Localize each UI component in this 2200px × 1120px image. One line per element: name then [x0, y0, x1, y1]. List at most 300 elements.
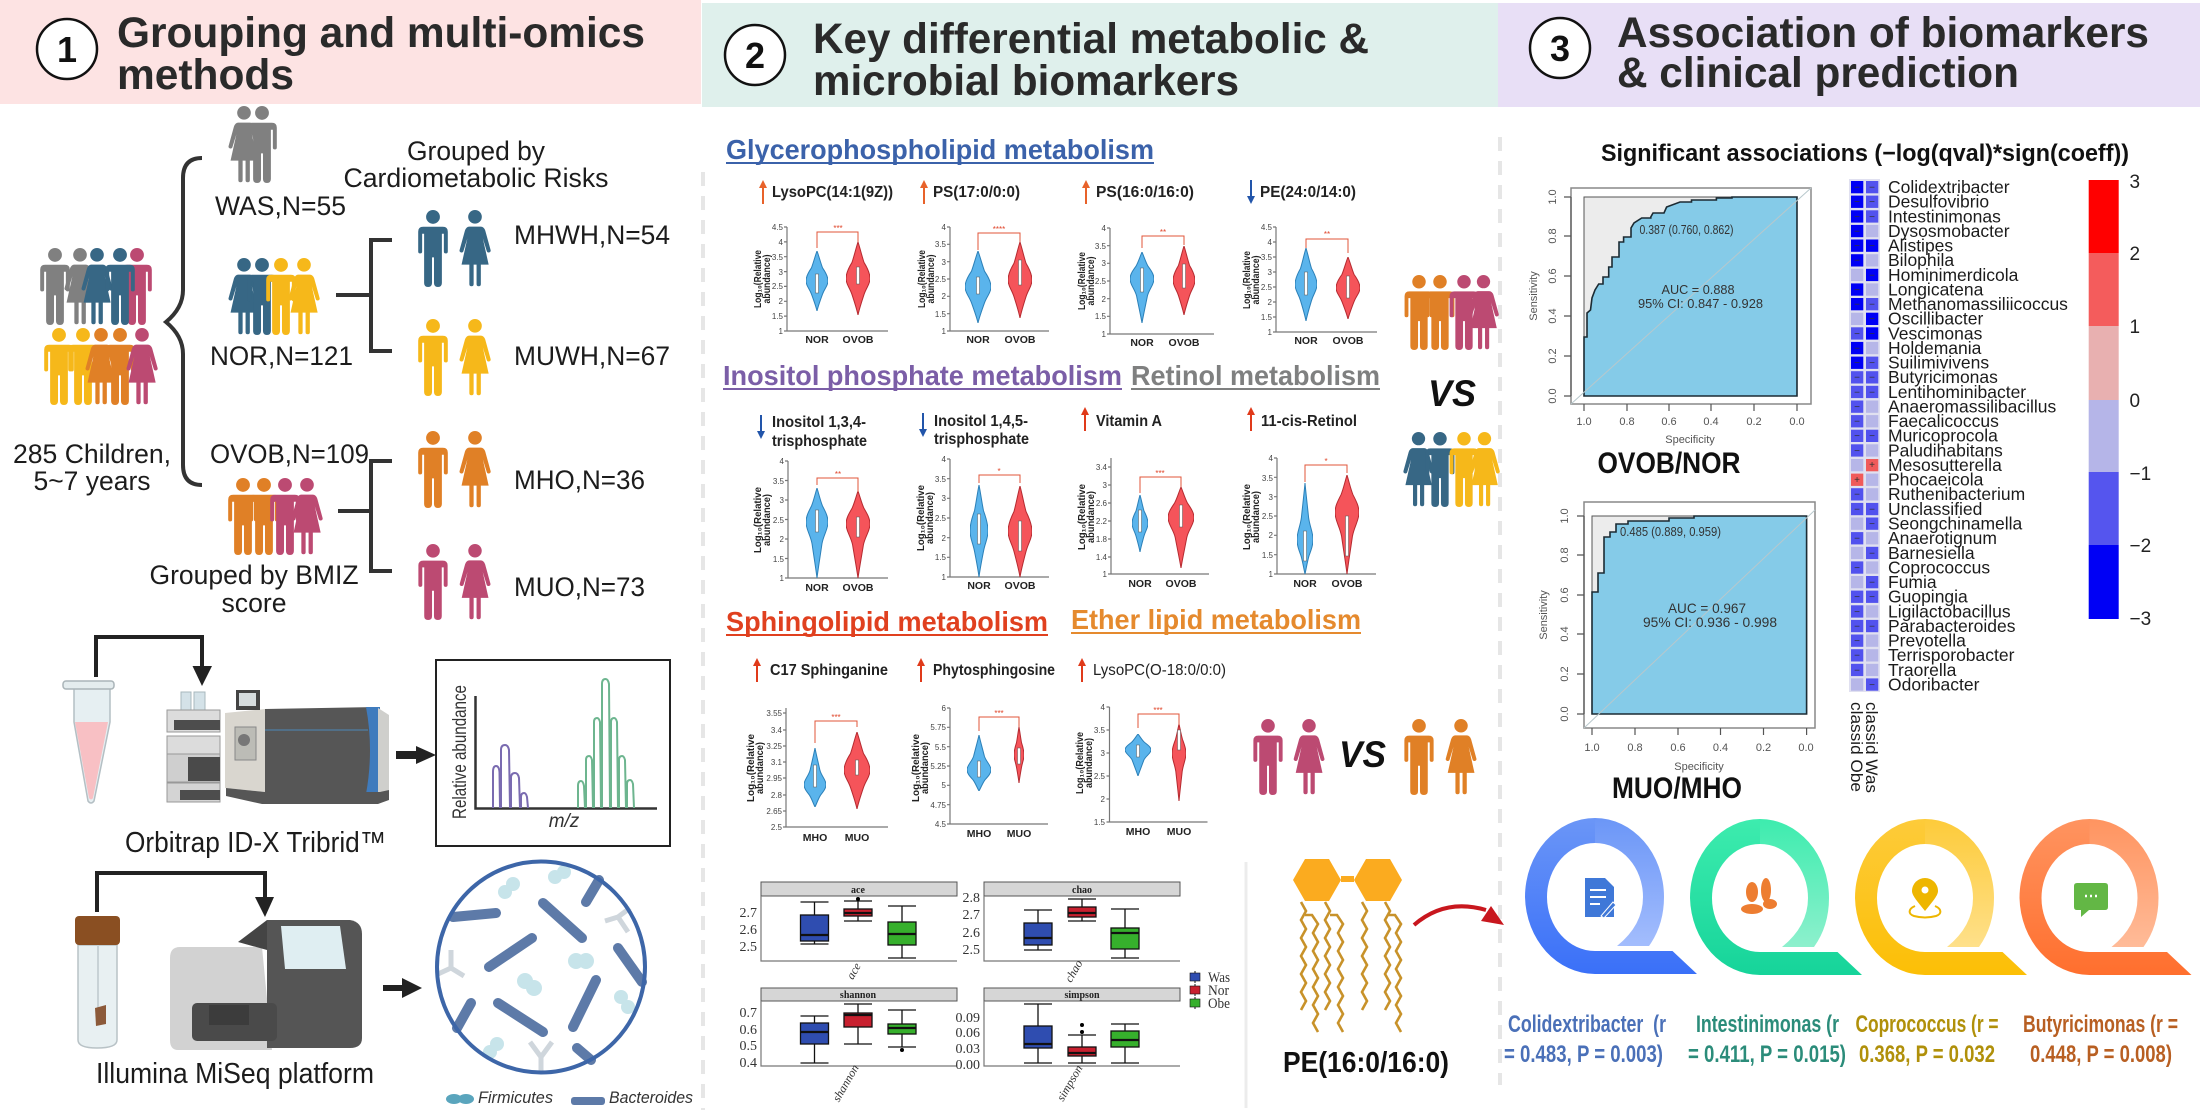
violin: LysoPC(O-18:0/0:0): LysoPC(O-18:0/0:0) — [1093, 662, 1226, 679]
header 2: Key differential metabolic & — [813, 15, 1369, 63]
violin: PS(16:0/16:0): 4 — [1102, 224, 1107, 233]
violin: inositol 1,3,4-trisphosphate: OVOB — [843, 582, 874, 594]
violin: vitamin A: 1.8 — [1096, 535, 1108, 544]
ROC chart: MUO/MHO: 0.0 — [1559, 706, 1571, 722]
chart: mass spectrum — [436, 660, 670, 846]
colour scale legend — [2089, 172, 2151, 630]
heatmap: significant associations: Traorella — [1888, 660, 1957, 680]
group: MUO — [418, 544, 645, 620]
arrow: stool to sequencer — [97, 873, 265, 912]
heatmap: significant associations: Ruthenibacterium — [1888, 484, 2025, 504]
panel 3: association and clinical prediction — [1498, 3, 2200, 1068]
heatmap: significant associations: Lentihominibacter — [1888, 382, 2026, 402]
violin: LysoPC(O-18:0/0:0): Log₁₀(Relative — [1075, 732, 1086, 794]
ROC chart: OVOB/NOR: Specificity — [1665, 434, 1715, 446]
violin: LysoPC(14:1(9Z)): 1 — [779, 327, 784, 336]
label: 285 children — [13, 439, 171, 496]
ROC chart: OVOB/NOR: 0.2 — [1746, 416, 1762, 428]
box plot: shannon: shannon — [829, 1062, 862, 1104]
group: MHWH — [418, 210, 670, 287]
heatmap: significant associations: Ligilactobacillus — [1888, 601, 2011, 621]
violin: PE(24:0/14:0): 4 — [1268, 238, 1273, 247]
ring card: Butyricimonas — [2020, 819, 2192, 1068]
violin: LysoPC(O-18:0/0:0): 2.5 — [1094, 772, 1106, 781]
violin: PE(24:0/14:0): 3 — [1268, 268, 1273, 277]
icon: microbiome circle — [437, 862, 645, 1072]
violin: inositol 1,3,4-trisphosphate — [753, 414, 888, 594]
heatmap: significant associations: Desulfovibrio — [1888, 192, 1989, 212]
violin: LysoPC(14:1(9Z)): NOR — [805, 334, 829, 346]
violin: C17 sphinganine: *** — [831, 713, 841, 722]
violin: inositol 1,3,4-trisphosphate: ** — [835, 470, 841, 479]
box plot: simpson — [956, 988, 1180, 1104]
ROC chart: OVOB/NOR — [1528, 188, 1811, 446]
violin: 11-cis-retinol: 1.5 — [1262, 551, 1274, 560]
group icons: OVOB vs NOR — [1403, 275, 1500, 507]
violin: PE(24:0/14:0): Log₁₀(Relative — [1242, 251, 1253, 309]
violin: PS(17:0/0:0): OVOB — [1005, 334, 1036, 346]
ROC chart: OVOB/NOR: 0.6 — [1547, 268, 1559, 284]
heatmap: significant associations: Hominimerdicola — [1888, 265, 2019, 285]
violin: C17 sphinganine — [746, 658, 888, 844]
ROC chart: MUO/MHO: 1.0 — [1559, 508, 1571, 524]
violin: PE(24:0/14:0): NOR — [1294, 335, 1318, 347]
violin: 11-cis-retinol: 2.5 — [1262, 512, 1274, 521]
violin: PS(16:0/16:0): 1.5 — [1095, 312, 1107, 321]
heading: glycerophospholipid metabolism: Glycerophospholipid metabolism — [726, 134, 1154, 165]
violin: LysoPC(O-18:0/0:0): 2 — [1101, 795, 1106, 804]
connector: NOR split — [336, 240, 392, 351]
ring card: Coprococcus: Coprococcus (r = — [1856, 1011, 1998, 1038]
violin: inositol 1,3,4-trisphosphate: abundance) — [762, 494, 773, 546]
ROC chart: OVOB/NOR: 0.2 — [1547, 348, 1559, 364]
ROC chart: MUO/MHO: 0.6 — [1559, 587, 1571, 603]
violin: PS(17:0/0:0): 2 — [942, 292, 947, 301]
violin: LysoPC(O-18:0/0:0): abundance) — [1084, 738, 1095, 788]
violin: vitamin A: 3.4 — [1096, 463, 1108, 472]
violin: LysoPC(14:1(9Z)): 2 — [779, 297, 784, 306]
ROC chart: MUO/MHO: 0.485 (0.889, 0.959) — [1620, 525, 1721, 539]
ROC chart: MUO/MHO: 0.8 — [1559, 547, 1571, 563]
ROC chart: MUO/MHO: 0.2 — [1559, 666, 1571, 682]
header 3: Association of biomarkers — [1617, 9, 2149, 57]
group: MUWH: MUWH,N=67 — [514, 341, 670, 371]
box plot: chao: chao — [1072, 885, 1092, 896]
heatmap: significant associations: −−−−−−−−−−−−−−−−−−−−−−−−−−− — [1854, 182, 1860, 676]
heatmap: significant associations: Alistipes — [1888, 236, 1953, 256]
violin: PS(16:0/16:0): 1 — [1102, 330, 1107, 339]
violin: 11-cis-retinol: 2 — [1269, 531, 1274, 540]
icon: PE(16:0/16:0) molecule — [1293, 859, 1402, 1032]
ring card: Colidextribacter: Colidextribacter (r — [1508, 1011, 1666, 1038]
ring card: Intestinimonas: Intestinimonas (r — [1696, 1011, 1839, 1038]
group: MUO: MUO,N=73 — [514, 572, 645, 602]
violin: inositol 1,4,5-trisphosphate: NOR — [967, 580, 991, 592]
colour scale legend: 3 — [2130, 172, 2140, 193]
header 1 — [0, 0, 701, 104]
violin: 11-cis-retinol — [1242, 407, 1376, 590]
label: MUO/MHO: MUO/MHO — [1612, 772, 1742, 805]
box plot: shannon: 0.6 — [740, 1023, 757, 1038]
box plot: shannon: 0.5 — [740, 1039, 757, 1054]
violin: LysoPC(14:1(9Z)): LysoPC(14:1(9Z)) — [772, 184, 893, 201]
icon: all children group — [40, 248, 158, 405]
violin: phytosphingosine: abundance) — [920, 742, 931, 794]
header 1: Grouping and multi-omics — [117, 9, 645, 57]
heatmap: significant associations: Paludihabitans — [1888, 440, 2003, 460]
violin: LysoPC(14:1(9Z)): Log₁₀(Relative — [753, 250, 764, 308]
heatmap: significant associations: Barnesiella — [1888, 543, 1975, 563]
violin: phytosphingosine: MUO — [1007, 828, 1031, 840]
violin: inositol 1,3,4-trisphosphate: Inositol 1,3,4- — [772, 414, 866, 431]
heading: sphingolipid metabolism: Sphingolipid metabolism — [726, 606, 1048, 637]
violin: C17 sphinganine: 2.5 — [771, 823, 783, 832]
violin: LysoPC(O-18:0/0:0): MHO — [1126, 826, 1150, 838]
violin: PS(16:0/16:0): 2 — [1102, 295, 1107, 304]
group: OVOB: OVOB,N=109 — [210, 439, 369, 469]
violin: LysoPC(14:1(9Z)): 3.5 — [772, 253, 784, 262]
heatmap: significant associations: + — [1854, 475, 1860, 486]
heatmap: significant associations: Suilimivivens — [1888, 353, 1989, 373]
heatmap: significant associations: Intestinimonas — [1888, 206, 2001, 226]
violin: PS(17:0/0:0): **** — [993, 225, 1005, 234]
violin: phytosphingosine — [911, 658, 1055, 840]
violin: C17 sphinganine: 3.25 — [766, 742, 783, 751]
label: 285 children: 285 Children, — [13, 439, 171, 469]
violin: C17 sphinganine: MUO — [845, 832, 869, 844]
violin: C17 sphinganine: 2.95 — [766, 774, 783, 783]
arrowhead: sample to LC-MS — [192, 666, 212, 686]
heatmap: significant associations: Bilophila — [1888, 250, 1954, 270]
violin: vitamin A: 1.4 — [1096, 553, 1108, 562]
box plot: simpson: simpson — [1064, 990, 1100, 1001]
group icons: OVOB vs NOR: VS — [1428, 373, 1476, 414]
heatmap: significant associations: + — [1869, 460, 1875, 471]
violin: C17 sphinganine: abundance) — [755, 742, 766, 794]
heatmap title: Significant associations (−log(qval)*sign(coeff)) — [1601, 140, 2129, 167]
heatmap: significant associations: Terrisporobacter — [1888, 645, 2015, 665]
violin: PE(24:0/14:0): 3.5 — [1261, 253, 1273, 262]
colour scale legend: 1 — [2130, 317, 2140, 338]
violin: LysoPC(14:1(9Z)): 1.5 — [772, 312, 784, 321]
icon: Orbitrap mass spectrometer — [225, 690, 389, 804]
group: WAS — [215, 106, 346, 221]
violin: inositol 1,3,4-trisphosphate: 2 — [780, 535, 785, 544]
violin: PS(16:0/16:0): ** — [1160, 228, 1166, 237]
violin: inositol 1,3,4-trisphosphate: Log₁₀(Relative — [753, 487, 764, 553]
violin: LysoPC(14:1(9Z)): 4.5 — [772, 223, 784, 232]
violin: 11-cis-retinol: 4 — [1269, 454, 1274, 463]
panel 1: grouping and multi-omics methods — [0, 0, 701, 1107]
ROC chart: MUO/MHO: 0.6 — [1670, 742, 1686, 754]
box plot: ace: ace — [851, 885, 865, 896]
label: grouped by BMIZ: Grouped by BMIZ — [150, 560, 358, 590]
group: MUWH — [418, 319, 670, 396]
violin: C17 sphinganine: 3.55 — [766, 709, 783, 718]
label: grouped by BMIZ: score — [222, 588, 286, 618]
legend: microbes: Bacteroides — [609, 1088, 693, 1107]
arrow: to spectrum — [396, 746, 436, 764]
violin: vitamin A: NOR — [1128, 578, 1152, 590]
heatmap: significant associations — [1847, 177, 2068, 793]
violin: PS(17:0/0:0): 4 — [942, 223, 947, 232]
legend: microbes: Firmicutes — [478, 1088, 553, 1107]
violin: PS(16:0/16:0): OVOB — [1169, 337, 1200, 349]
violin: LysoPC(14:1(9Z)) — [753, 180, 893, 346]
violin: PS(16:0/16:0): 3 — [1102, 259, 1107, 268]
violin: phytosphingosine: 6 — [942, 704, 947, 713]
panel 2: key differential biomarkers — [702, 3, 1504, 1104]
box plot: shannon: 0.7 — [740, 1006, 757, 1021]
violin: vitamin A: OVOB — [1166, 578, 1197, 590]
violin: phytosphingosine: 5.5 — [935, 743, 947, 752]
ROC chart: MUO/MHO: 0.4 — [1559, 626, 1571, 642]
violin: PE(24:0/14:0): abundance) — [1251, 256, 1262, 304]
violin: PE(24:0/14:0): 2.5 — [1261, 283, 1273, 292]
ring card: Coprococcus: 0.368, P = 0.032 — [1859, 1041, 1995, 1068]
heading: inositol phosphate metabolism: Inositol phosphate metabolism — [723, 360, 1122, 391]
heatmap: significant associations: classid Obe — [1847, 702, 1866, 792]
heatmap: significant associations: Muricoprocola — [1888, 426, 1998, 446]
icon: LC stack — [167, 692, 220, 802]
violin: vitamin A: 1 — [1103, 570, 1108, 579]
colour scale legend: −1 — [2130, 464, 2151, 485]
violin: 11-cis-retinol: Log₁₀(Relative — [1242, 484, 1253, 550]
violin: PE(24:0/14:0): 2 — [1268, 298, 1273, 307]
violin: vitamin A: Vitamin A — [1096, 413, 1162, 430]
violin: phytosphingosine: MHO — [967, 828, 991, 840]
violin: inositol 1,3,4-trisphosphate: 1.5 — [773, 555, 785, 564]
violin: phytosphingosine: 5.75 — [930, 723, 947, 732]
violin: PS(16:0/16:0): abundance) — [1086, 256, 1097, 306]
violin: phytosphingosine: 4.75 — [930, 801, 947, 810]
violin: C17 sphinganine: MHO — [803, 832, 827, 844]
ROC chart: MUO/MHO: 0.2 — [1756, 742, 1771, 754]
violin: PS(17:0/0:0): PS(17:0/0:0) — [933, 184, 1020, 201]
heatmap: significant associations: Odoribacter — [1888, 674, 1980, 694]
violin: C17 sphinganine: 3.4 — [771, 726, 783, 735]
label: 285 children: 5~7 years — [34, 466, 150, 496]
ROC chart: OVOB/NOR: 0.8 — [1547, 228, 1559, 244]
group: WAS: WAS,N=55 — [215, 191, 346, 221]
group: OVOB — [210, 439, 369, 555]
box plot: ace: 2.5 — [740, 940, 757, 955]
ROC chart: OVOB/NOR: 1.0 — [1547, 189, 1559, 205]
ROC chart: OVOB/NOR: 0.4 — [1547, 308, 1559, 324]
arrow: sample to LC-MS — [96, 637, 202, 677]
heatmap: significant associations: Vescimonas — [1888, 323, 1983, 343]
heatmap: significant associations: Coprococcus — [1888, 557, 1990, 577]
ring card: Colidextribacter: = 0.483, P = 0.003) — [1504, 1041, 1663, 1068]
arrow: molecule to panel 3 — [1414, 906, 1504, 925]
violin: phytosphingosine: Phytosphingosine — [933, 662, 1055, 679]
violin: C17 sphinganine: Log₁₀(Relative — [746, 734, 757, 802]
heatmap: significant associations: Mesosutterella — [1888, 455, 2002, 475]
violin: inositol 1,4,5-trisphosphate — [916, 413, 1049, 592]
box plot: chao: 2.6 — [962, 926, 980, 941]
violin: 11-cis-retinol: 11-cis-Retinol — [1261, 413, 1357, 430]
violin: inositol 1,4,5-trisphosphate: 3 — [942, 494, 947, 503]
violin: inositol 1,4,5-trisphosphate: trisphosphate — [934, 431, 1029, 448]
violin: LysoPC(O-18:0/0:0) — [1075, 658, 1226, 838]
violin: 11-cis-retinol: abundance) — [1251, 491, 1262, 543]
violin: PS(17:0/0:0): NOR — [966, 334, 990, 346]
brace — [166, 158, 202, 485]
violin: phytosphingosine: Log₁₀(Relative — [911, 734, 922, 802]
box plot: chao: chao — [1062, 957, 1085, 985]
violin: PS(17:0/0:0): 1 — [942, 327, 947, 336]
violin: PS(16:0/16:0) — [1077, 180, 1214, 349]
ROC chart: OVOB/NOR: 0.6 — [1661, 416, 1677, 428]
icon: stool sample vial — [75, 916, 120, 1048]
violin: C17 sphinganine: 2.65 — [766, 807, 783, 816]
violin: inositol 1,4,5-trisphosphate: * — [997, 467, 1001, 476]
label: Illumina MiSeq platform: Illumina MiSeq platform — [96, 1058, 374, 1090]
group: MHO — [418, 431, 645, 508]
group: MHO: MHO,N=36 — [514, 465, 645, 495]
violin: 11-cis-retinol: 1 — [1269, 570, 1274, 579]
violin: LysoPC(14:1(9Z)): 3 — [779, 268, 784, 277]
violin: phytosphingosine: 5 — [942, 781, 947, 790]
violin: 11-cis-retinol: NOR — [1293, 578, 1317, 590]
violin: PS(16:0/16:0): NOR — [1130, 337, 1154, 349]
ROC chart: MUO/MHO: 1.0 — [1584, 742, 1600, 754]
violin: vitamin A: 2.6 — [1096, 499, 1108, 508]
violin: PS(17:0/0:0): 1.5 — [935, 310, 947, 319]
violin: PS(16:0/16:0): 2.5 — [1095, 277, 1107, 286]
box plot legend — [1190, 970, 1230, 1012]
heatmap: significant associations: Methanomassiliicoccus — [1888, 294, 2068, 314]
heatmap: significant associations: −−−−−−−−−−−−−−−−−−− — [1869, 182, 1875, 691]
violin: inositol 1,3,4-trisphosphate: 4 — [780, 457, 785, 466]
violin: C17 sphinganine: 2.8 — [771, 791, 783, 800]
violin: 11-cis-retinol: 3.5 — [1262, 474, 1274, 483]
box plot: shannon — [740, 988, 957, 1104]
violin: vitamin A: Log₁₀(Relative — [1077, 484, 1088, 550]
box plot: chao: 2.7 — [962, 908, 980, 923]
ROC chart: OVOB/NOR: 0.8 — [1619, 416, 1635, 428]
violin: LysoPC(O-18:0/0:0): 1.5 — [1094, 818, 1106, 827]
box plot: ace — [740, 882, 957, 982]
violin: 11-cis-retinol: * — [1324, 457, 1328, 466]
ring card: Coprococcus — [1855, 819, 2027, 1068]
violin: LysoPC(14:1(9Z)): abundance) — [762, 254, 773, 304]
arrow: sequencer to microbiome — [383, 978, 422, 998]
box plot: shannon: shannon — [840, 990, 877, 1001]
heatmap: significant associations: Guopingia — [1888, 587, 1968, 607]
heading: grouped by cardiometabolic risks — [344, 136, 608, 193]
violin: phytosphingosine: 4.5 — [935, 820, 947, 829]
box plot: ace: 2.6 — [740, 923, 757, 938]
violin: inositol 1,4,5-trisphosphate: 2 — [942, 534, 947, 543]
box plot legend: Nor — [1208, 983, 1229, 999]
group icons: MUO vs MHO — [1253, 719, 1476, 795]
violin: inositol 1,3,4-trisphosphate: 3.5 — [773, 477, 785, 486]
violin: LysoPC(O-18:0/0:0): 3.5 — [1094, 726, 1106, 735]
violin: vitamin A — [1077, 407, 1209, 590]
box plot: chao — [962, 882, 1180, 985]
box plot legend: Obe — [1208, 996, 1230, 1012]
header 2: microbial biomarkers — [813, 57, 1239, 105]
violin: PS(16:0/16:0): PS(16:0/16:0) — [1096, 184, 1194, 201]
colour scale legend: −2 — [2130, 536, 2151, 557]
ROC chart: OVOB/NOR: 0.0 — [1547, 388, 1559, 404]
group: MHWH: MHWH,N=54 — [514, 220, 670, 250]
heading: retinol metabolism: Retinol metabolism — [1131, 360, 1380, 391]
box plot: chao: 2.8 — [962, 891, 980, 906]
ring card: Intestinimonas: = 0.411, P = 0.015) — [1688, 1041, 1846, 1068]
violin: inositol 1,3,4-trisphosphate: trisphosphate — [772, 433, 867, 450]
legend: microbes — [446, 1088, 693, 1107]
violin: inositol 1,3,4-trisphosphate: 3 — [780, 496, 785, 505]
violin: C17 sphinganine: C17 Sphinganine — [770, 662, 888, 679]
violin: LysoPC(O-18:0/0:0): *** — [1153, 706, 1163, 715]
box plot: simpson: 0.03 — [956, 1042, 980, 1057]
label: grouped by BMIZ — [150, 560, 358, 618]
box plot legend: Was — [1208, 970, 1230, 986]
ROC chart: OVOB/NOR: 0.4 — [1703, 416, 1719, 428]
violin: phytosphingosine: 5.25 — [930, 762, 947, 771]
violin: vitamin A: *** — [1155, 469, 1165, 478]
group: NOR — [210, 258, 353, 371]
violin: 11-cis-retinol: 3 — [1269, 493, 1274, 502]
violin: 11-cis-retinol: OVOB — [1332, 578, 1363, 590]
heatmap: significant associations: Colidextribacter — [1888, 177, 2010, 197]
ROC chart: MUO/MHO: 0.0 — [1798, 742, 1814, 754]
colour scale legend: 0 — [2130, 391, 2140, 412]
group: NOR: NOR,N=121 — [210, 341, 353, 371]
label: PE(16:0/16:0): PE(16:0/16:0) — [1283, 1047, 1449, 1079]
ROC chart: OVOB/NOR: Sensitivity — [1528, 271, 1540, 321]
header 3: & clinical prediction — [1617, 49, 2019, 97]
ROC chart: MUO/MHO: 0.8 — [1627, 742, 1643, 754]
heatmap: significant associations: Anaerotignum — [1888, 528, 1997, 548]
violin: phytosphingosine: *** — [994, 709, 1004, 718]
violin: LysoPC(O-18:0/0:0): 3 — [1101, 749, 1106, 758]
colour scale legend: 2 — [2130, 244, 2140, 265]
violin: PE(24:0/14:0): 4.5 — [1261, 223, 1273, 232]
violin: PS(16:0/16:0): Log₁₀(Relative — [1077, 252, 1088, 310]
heatmap: significant associations: Unclassified — [1888, 499, 1982, 519]
heatmap: significant associations: Holdemania — [1888, 338, 1982, 358]
box plot: simpson: simpson — [1054, 1062, 1085, 1104]
box plot: chao: 2.5 — [962, 943, 980, 958]
heatmap: significant associations: Seongchinamella — [1888, 514, 2023, 534]
violin: vitamin A: 2.2 — [1096, 517, 1108, 526]
ROC chart: MUO/MHO: Sensitivity — [1538, 590, 1550, 640]
violin: inositol 1,4,5-trisphosphate: 1 — [942, 573, 947, 582]
header 2 — [702, 3, 1498, 107]
ROC chart: MUO/MHO: 0.4 — [1713, 742, 1728, 754]
colour scale legend: −3 — [2130, 609, 2151, 630]
violin: vitamin A: 3 — [1103, 481, 1108, 490]
heatmap: significant associations: classid Was — [1862, 702, 1881, 793]
connector: OVOB split — [338, 461, 392, 571]
label: OVOB/NOR: OVOB/NOR — [1598, 447, 1741, 480]
violin: LysoPC(14:1(9Z)): *** — [833, 224, 843, 233]
violin: PE(24:0/14:0): OVOB — [1333, 335, 1364, 347]
violin: PE(24:0/14:0) — [1242, 180, 1377, 347]
heatmap: significant associations: Anaeromassilibacillus — [1888, 396, 2057, 416]
box plot: ace: 2.7 — [740, 906, 757, 921]
violin: LysoPC(14:1(9Z)): 2.5 — [772, 282, 784, 291]
header 1: 1 — [57, 29, 77, 70]
heading: ether lipid metabolism: Ether lipid metabolism — [1071, 604, 1361, 635]
violin: LysoPC(14:1(9Z)): 4 — [779, 238, 784, 247]
violin: inositol 1,4,5-trisphosphate: OVOB — [1005, 580, 1036, 592]
heading: grouped by cardiometabolic risks: Cardiometabolic Risks — [344, 163, 608, 193]
heatmap: significant associations: Dysosmobacter — [1888, 221, 2010, 241]
